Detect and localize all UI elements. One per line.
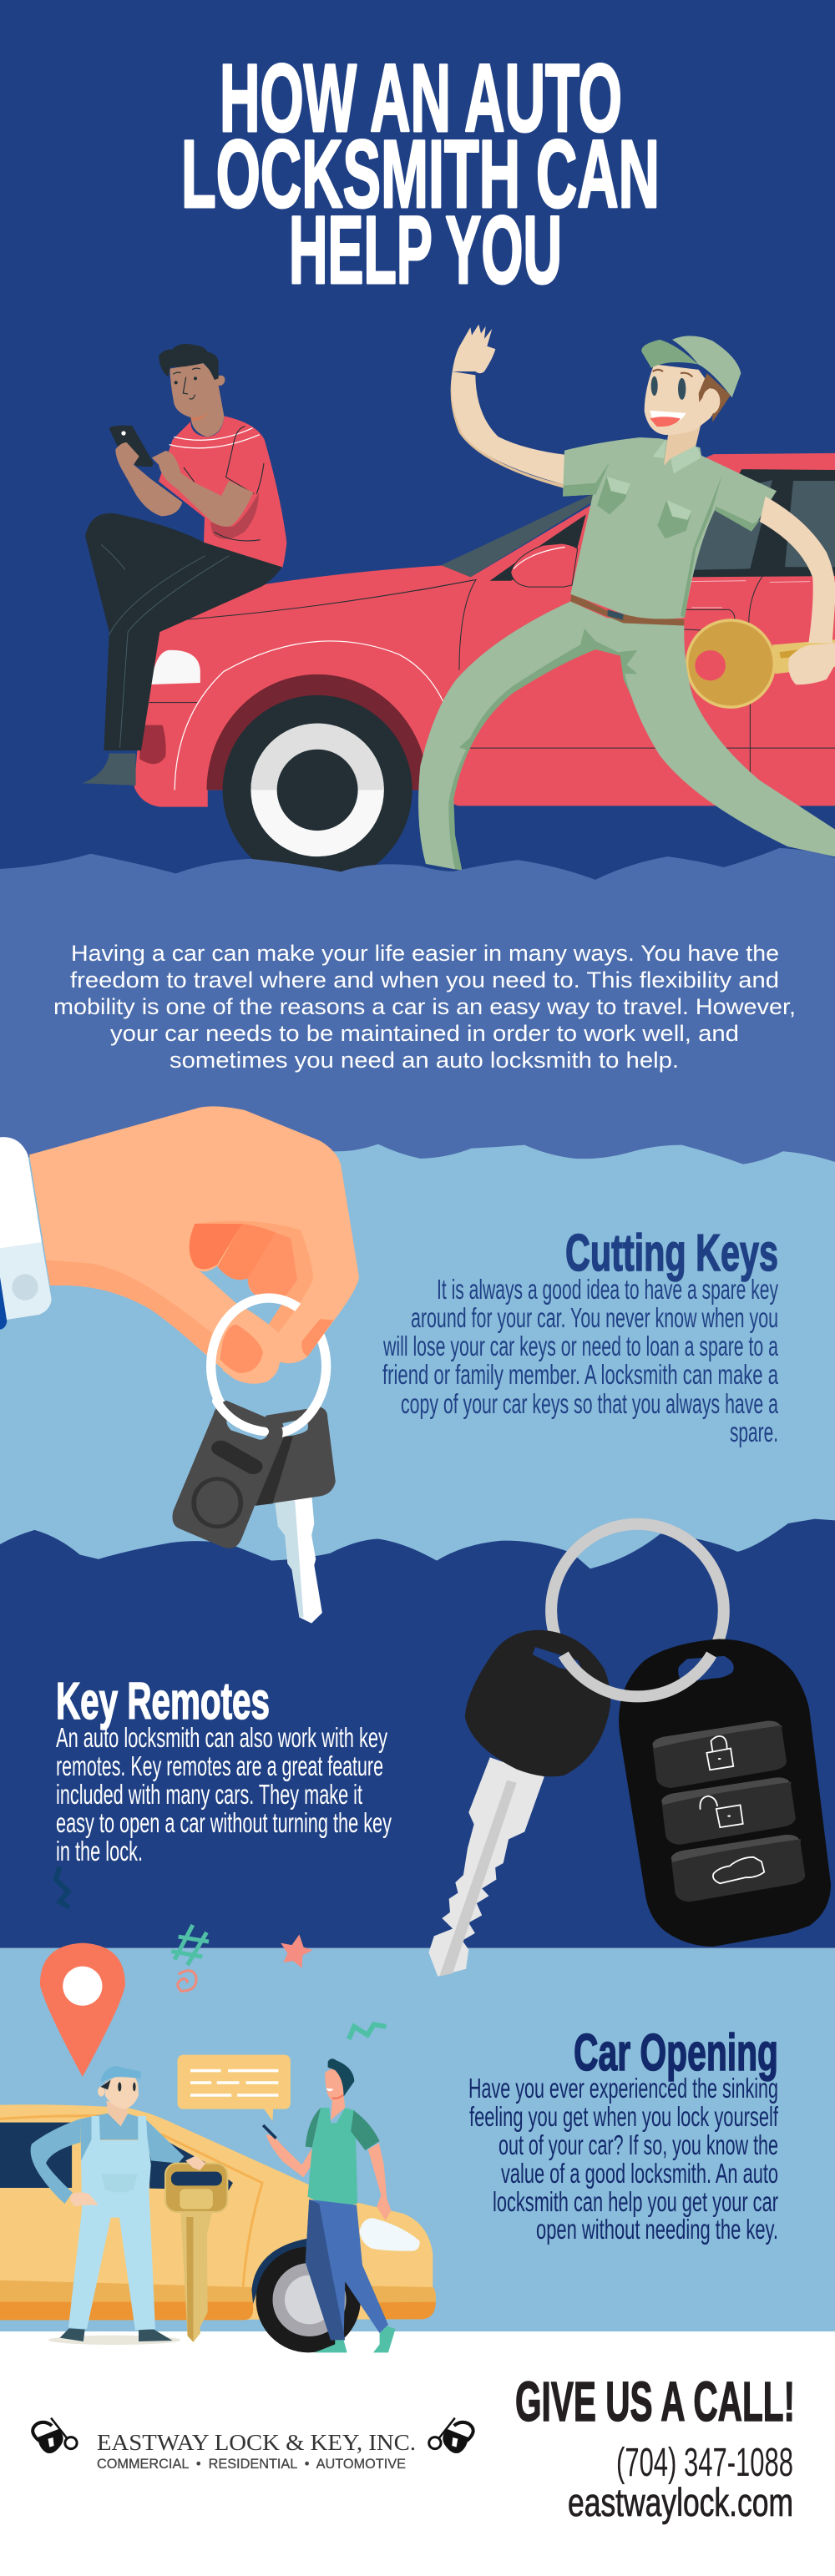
key remotes section background with wave [0,1519,835,1948]
intro paragraph: mobility is one of the reasons a car is an easy way to travel. However, [53,994,796,1019]
intro paragraph: freedom to travel where and when you need to. This flexibility and [70,967,779,993]
illustration: man on red car and waving locksmith [0,325,835,903]
body: car opening [468,2073,779,2245]
panel text: car opening [468,2024,779,2245]
title [181,45,660,304]
logo icon right [429,2418,473,2453]
cutting keys section background with wave [0,1144,835,1634]
intro paragraph [53,941,796,1073]
title: HELP YOU [289,197,562,304]
body: key remotes: included with many cars. They make it [56,1779,362,1810]
intro paragraph: your car needs to be maintained in order to work well, and [110,1021,739,1046]
squiggle [56,1866,69,1907]
panel text: cutting keys [382,1225,778,1447]
heading: key remotes: Key Remotes [56,1673,270,1730]
rear fob [236,1407,336,1506]
man with phone [83,344,286,785]
steel ring front [564,1654,711,1696]
body: cutting keys: spare. [730,1417,778,1447]
body: key remotes [56,1722,392,1866]
body: key remotes: easy to open a car without turning the key [56,1807,392,1838]
company tagline: COMMERCIAL • RESIDENTIAL • AUTOMOTIVE [97,2456,406,2472]
red car [134,453,835,885]
contact block [515,2371,795,2524]
body: key remotes: An auto locksmith can also work with key [56,1722,387,1753]
top section background [0,0,835,885]
shirt cuff [0,1137,52,1330]
wave divider [0,848,835,903]
car opening section background [0,1948,835,2331]
illustration: remote key fob [56,1524,831,1977]
key blade [274,1493,322,1624]
body: cutting keys [382,1274,778,1447]
decorations and map pin [40,1925,386,2077]
yellow car [0,2104,436,2352]
body: key remotes: in the lock. [56,1836,143,1866]
mechanic [31,2066,184,2345]
panel text: key remotes [56,1673,392,1866]
front fob [172,1401,283,1548]
logo: Eastway Lock & Key [33,2418,473,2472]
button: lock [652,1721,787,1788]
hand [29,1106,359,1384]
fingertips [220,1277,359,1384]
locksmith with key [418,325,835,871]
button: trunk [671,1835,805,1902]
company name: EASTWAY LOCK & KEY, INC. [97,2430,416,2455]
intro paragraph: Having a car can make your life easier in many ways. You have the [71,941,779,966]
illustration: hand holding car keys [0,1106,359,1624]
body: key remotes: remotes. Key remotes are a great feature [56,1750,383,1781]
customer [263,2058,396,2352]
key head [465,1630,610,1776]
steel ring back [551,1524,724,1697]
key blade [428,1757,544,1977]
key ring [211,1298,326,1434]
logo icon left [33,2418,77,2453]
intro section background [0,885,835,1235]
illustration: mechanic, customer and yellow car [0,1925,436,2352]
speech bubble [177,2055,291,2121]
button: unlock [661,1777,796,1845]
intro paragraph: sometimes you need an auto locksmith to help. [170,1048,679,1073]
remote body [619,1639,831,1947]
big gold key [165,2156,227,2342]
